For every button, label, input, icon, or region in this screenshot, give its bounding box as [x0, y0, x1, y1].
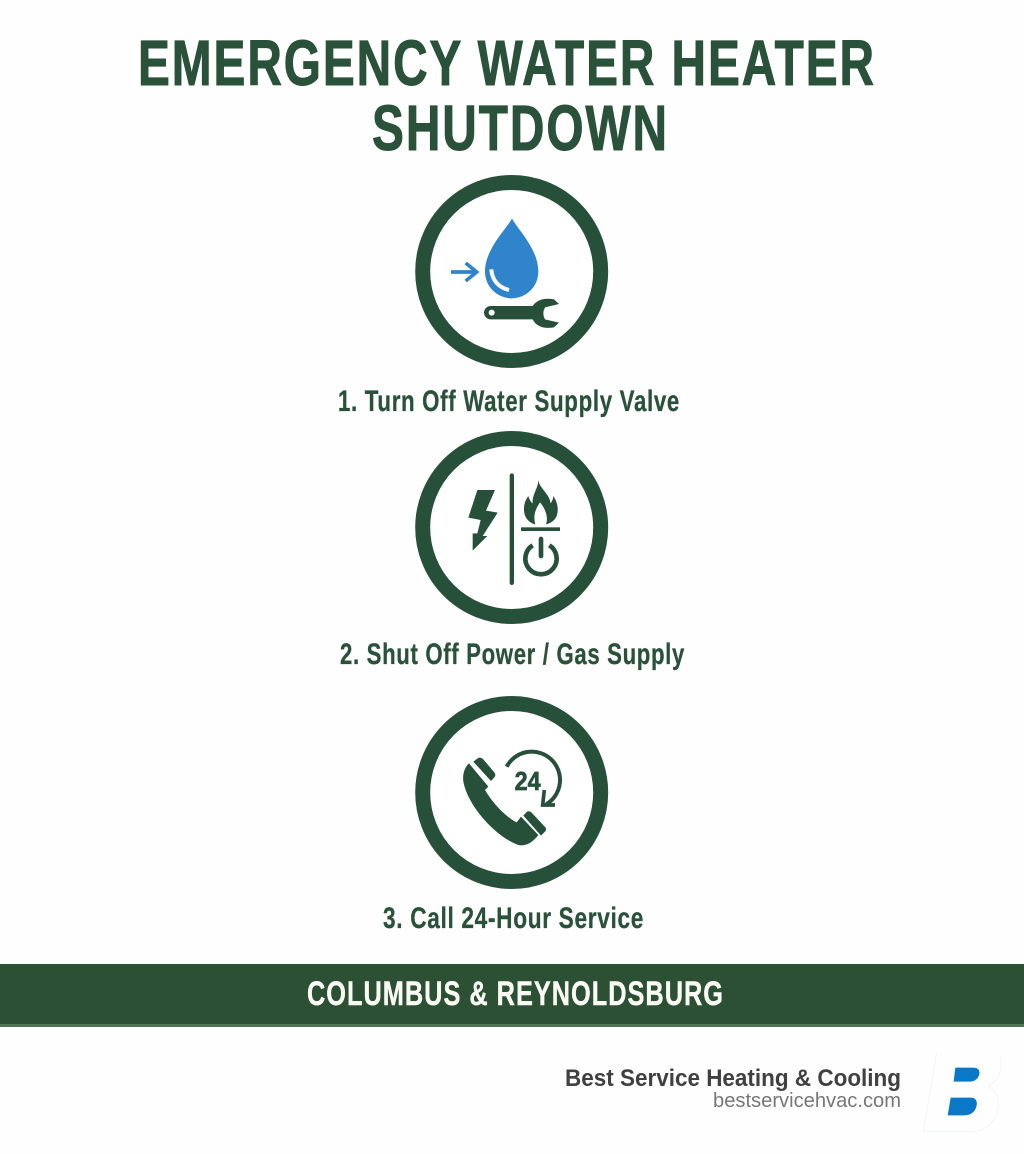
banner: location [0, 964, 1024, 1027]
title: SHUTDOWN [372, 92, 669, 164]
footer: company name and website [565, 1065, 901, 1112]
title [138, 27, 876, 164]
icon: water drop, arrow and wrench in ring [423, 182, 601, 360]
step 2: shut off power and gas [340, 438, 685, 671]
logo: B mark [923, 1053, 1001, 1132]
footer: company name and website: Best Service Heating & Cooling [565, 1065, 901, 1092]
banner: location: COLUMBUS & REYNOLDSBURG [307, 975, 724, 1013]
icon: phone with 24-hour arrow in ring [423, 704, 601, 882]
step 3: call 24-hour service [383, 704, 644, 935]
footer: company name and website: bestservicehvac.com [713, 1090, 901, 1112]
label: step 2: 2. Shut Off Power / Gas Supply [340, 638, 685, 671]
icon: lightning, flame and power in ring [423, 438, 601, 616]
icon: phone with 24-hour arrow in ring: 24 [515, 766, 541, 796]
label: step 1: 1. Turn Off Water Supply Valve [338, 385, 680, 418]
label: step 3: 3. Call 24-Hour Service [383, 902, 644, 935]
step 1: turn off water supply valve [338, 182, 680, 418]
